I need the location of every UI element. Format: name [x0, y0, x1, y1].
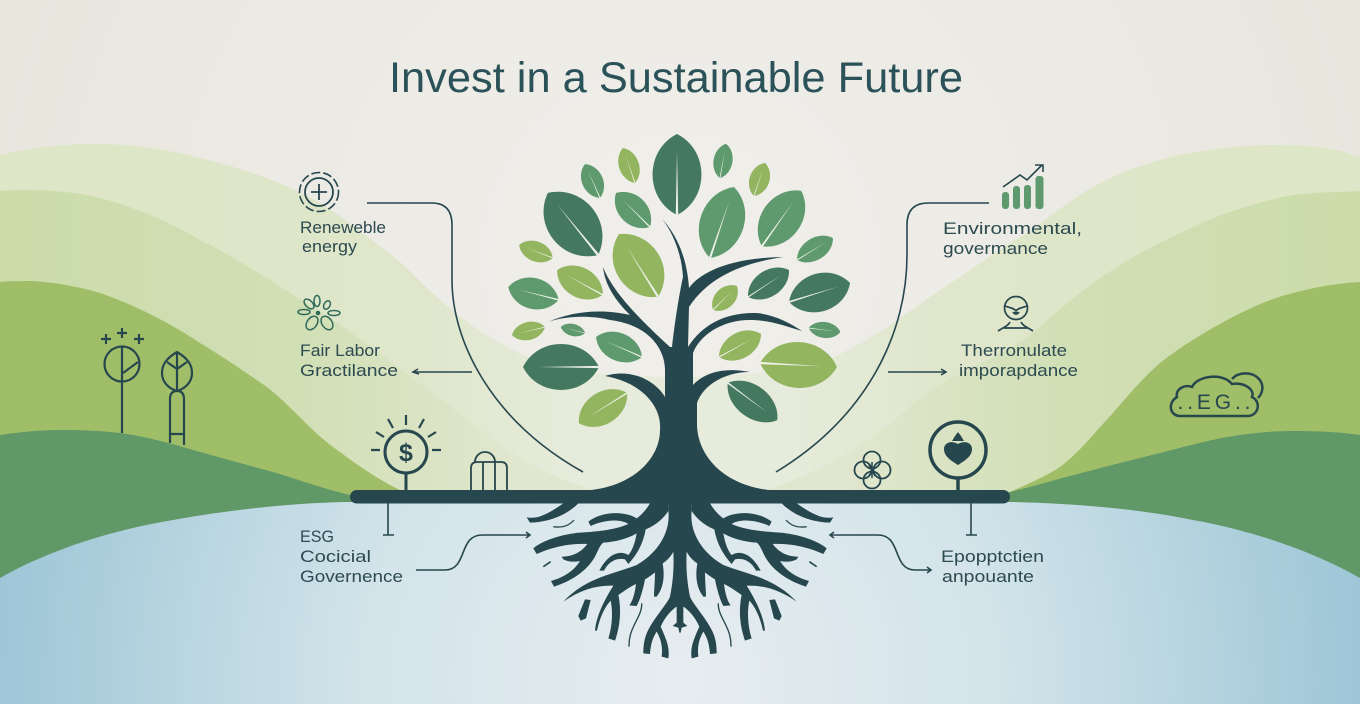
tree trunk and branches	[548, 219, 802, 491]
icon: dollar bulb	[371, 415, 441, 490]
icon: ESG cloud	[1171, 373, 1262, 416]
label: renewable energy	[300, 218, 386, 256]
hill layer: mid green	[0, 281, 1360, 704]
label: renewable energy: Reneweble	[300, 218, 386, 237]
icon: arched building	[471, 452, 507, 490]
icon: growth chart	[1002, 165, 1044, 209]
icon: renewable energy target	[300, 172, 338, 212]
icon: dollar bulb: $	[399, 439, 413, 467]
ground bar	[350, 490, 1010, 504]
label: environmental governance: Environmental,	[943, 219, 1082, 238]
label: right bottom	[941, 547, 1044, 586]
water panel	[0, 502, 1360, 704]
label: right middle: Therronulate	[961, 341, 1067, 360]
label: fair labor: Fair Labor	[300, 341, 380, 360]
label: right bottom: anpouante	[942, 567, 1034, 586]
label: right middle	[959, 341, 1078, 380]
connector lines	[367, 203, 989, 573]
hill layer: deep green	[0, 430, 1360, 704]
label: ESG social governance: Governence	[300, 567, 403, 586]
icon: sprout tree	[101, 328, 144, 433]
label: ESG social governance: ESG	[300, 527, 334, 546]
label: fair labor	[300, 341, 398, 380]
tree roots	[527, 503, 833, 658]
hill layer: pale green	[0, 144, 1360, 704]
hill layer: light green	[0, 190, 1360, 704]
label: renewable energy: energy	[302, 237, 358, 256]
icon: person	[998, 296, 1033, 331]
label: fair labor: Gractilance	[300, 361, 398, 380]
label: environmental governance: govermance	[943, 239, 1048, 258]
icon: flower star	[298, 296, 340, 332]
icon: clover	[854, 452, 890, 488]
label: right bottom: Epopptctien	[941, 547, 1044, 566]
title: Invest in a Sustainable Future	[389, 54, 963, 102]
icon: ESG cloud: ..EG..	[1178, 391, 1250, 414]
tree leaves	[504, 134, 856, 437]
label: right middle: imporapdance	[959, 361, 1078, 380]
icon: heart circle	[930, 422, 986, 490]
icon: leaf on stem	[162, 352, 192, 445]
label: ESG social governance	[300, 527, 403, 586]
label: ESG social governance: Cocicial	[300, 547, 371, 566]
label: environmental governance	[943, 219, 1082, 258]
